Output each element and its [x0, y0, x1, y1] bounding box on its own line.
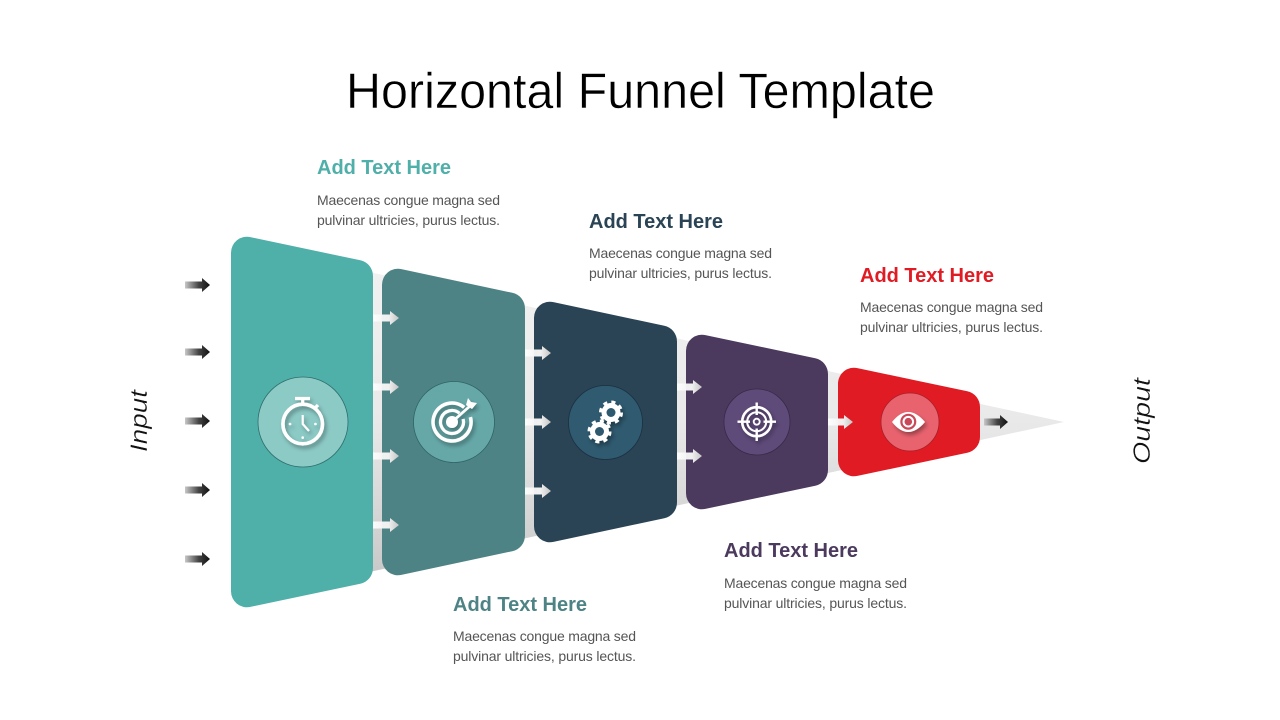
text block 5: Add Text Here — [860, 265, 994, 287]
text block 3: Maecenas congue magna sed — [589, 245, 772, 261]
text block 4 — [724, 540, 907, 611]
connector arrows: stage 2 to 3 — [525, 346, 551, 498]
text block 3: pulvinar ultricies, purus lectus. — [589, 265, 772, 281]
text block 2 — [453, 594, 636, 664]
text block 3: Add Text Here — [589, 211, 723, 233]
connector arrow: stage 4 to 5 — [828, 415, 853, 429]
icon: target — [433, 398, 477, 441]
panel 2: dark teal stage — [382, 269, 525, 575]
text block 4: Maecenas congue magna sed — [724, 575, 907, 591]
output arrow — [984, 415, 1008, 429]
text block 2: Maecenas congue magna sed — [453, 628, 636, 644]
funnel background cone — [360, 270, 1064, 574]
text block 5: Maecenas congue magna sed — [860, 299, 1043, 315]
text block 1: pulvinar ultricies, purus lectus. — [317, 212, 500, 228]
text block 5 — [860, 265, 1043, 335]
text block 4: Add Text Here — [724, 540, 858, 562]
output label: Output — [1129, 376, 1156, 464]
icon: crosshair — [738, 402, 776, 441]
panel 3: navy stage — [534, 302, 677, 542]
text block 4: pulvinar ultricies, purus lectus. — [724, 595, 907, 611]
icon: eye — [892, 412, 925, 432]
text block 2: pulvinar ultricies, purus lectus. — [453, 648, 636, 664]
text block 1 — [317, 157, 500, 228]
text block 5: pulvinar ultricies, purus lectus. — [860, 319, 1043, 335]
panel 4: purple stage — [686, 335, 828, 509]
text block 1: Add Text Here — [317, 157, 451, 179]
panel 5: red stage — [838, 368, 980, 476]
connector arrows: stage 3 to 4 — [677, 380, 702, 463]
icon: stopwatch — [283, 398, 323, 444]
title: Horizontal Funnel Template — [346, 63, 935, 119]
input arrows — [185, 278, 210, 566]
text block 1: Maecenas congue magna sed — [317, 192, 500, 208]
input label: Input — [126, 388, 153, 452]
text block 3 — [589, 211, 772, 281]
icon: gears — [589, 402, 622, 442]
text block 2: Add Text Here — [453, 594, 587, 616]
panel 1: teal stage — [231, 237, 373, 607]
connector arrows: stage 1 to 2 — [373, 311, 399, 532]
